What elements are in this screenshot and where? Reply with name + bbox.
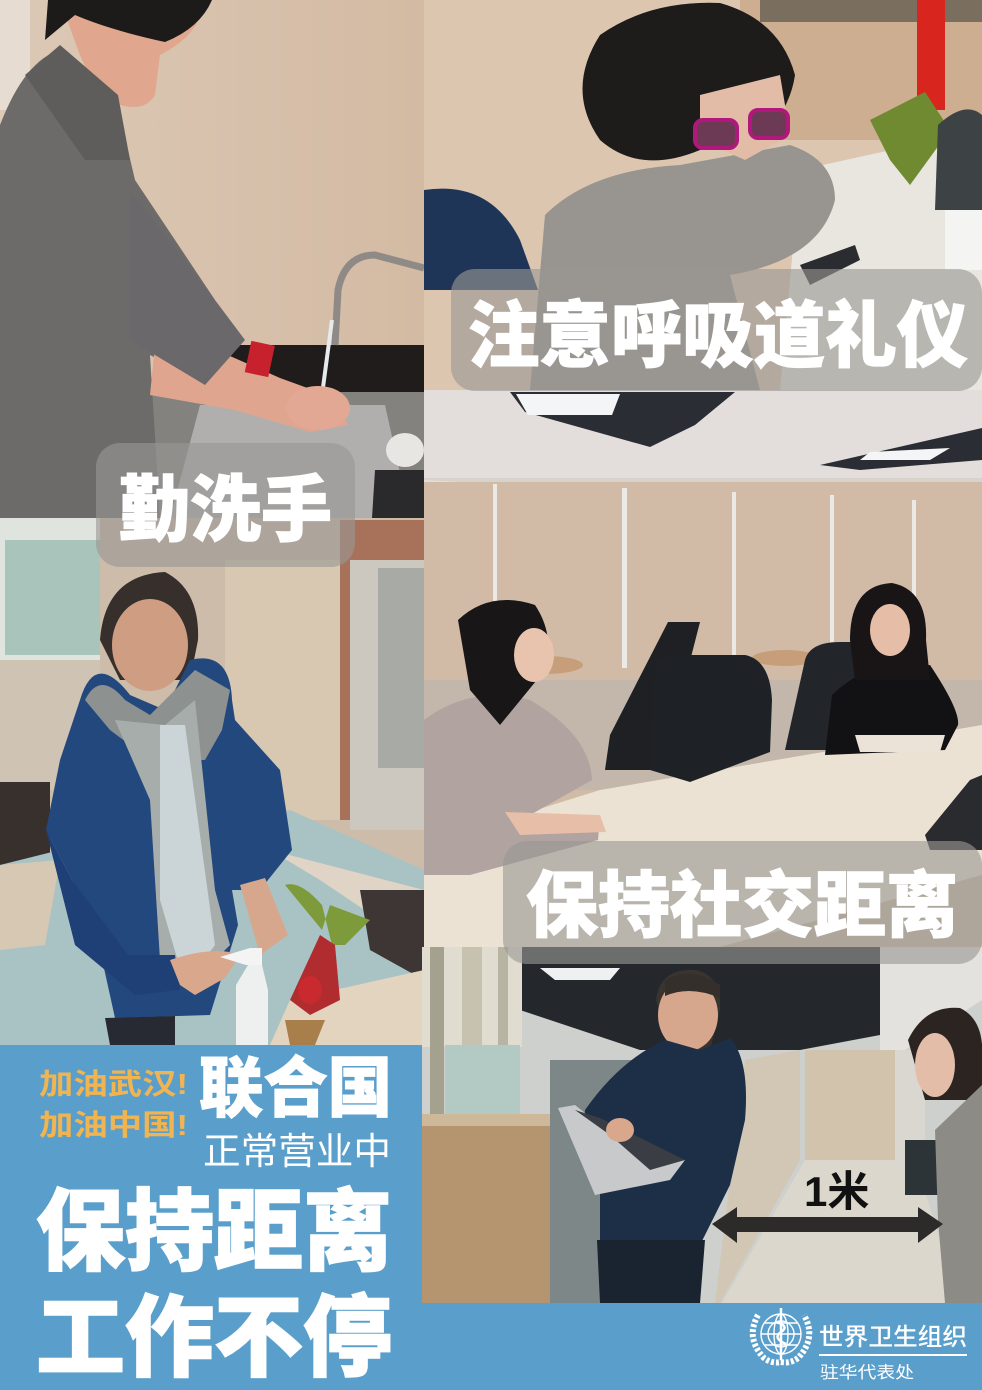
label: respiratory etiquette: 注意呼吸道礼仪 [468, 297, 968, 377]
organisation name: WHO: 世界卫生组织 [819, 1324, 967, 1351]
slogan: go Wuhan, go China: 加油中国! [39, 1109, 188, 1142]
photo: respiratory etiquette [424, 0, 982, 390]
label: respiratory etiquette [451, 269, 982, 391]
heading: United Nations: 联合国 [199, 1051, 392, 1125]
subheading: open for business: 正常营业中 [203, 1131, 391, 1172]
photo: washing hands [0, 0, 424, 518]
slogan: go Wuhan, go China: 加油武汉! [39, 1068, 188, 1101]
panel: blue poster background [0, 1045, 982, 1390]
label: wash hands: 勤洗手 [119, 471, 332, 551]
label: wash hands [96, 443, 355, 567]
label: social distancing [503, 841, 982, 964]
logo: WHO emblem [753, 1308, 809, 1362]
divider line under name [819, 1354, 967, 1356]
title: keep distance: 保持距离 [36, 1182, 392, 1282]
label: 1 metre: 1米 [804, 1168, 869, 1215]
organisation office: China representative office: 驻华代表处 [820, 1363, 914, 1382]
slogan: go Wuhan, go China [39, 1068, 188, 1142]
label: social distancing: 保持社交距离 [526, 867, 958, 947]
title: work does not stop: 工作不停 [36, 1288, 392, 1388]
arrow: distance [712, 1207, 943, 1243]
photo: social distancing [424, 390, 982, 947]
photo: hand sanitizer [0, 518, 424, 1045]
photo: one metre apart [422, 947, 982, 1303]
